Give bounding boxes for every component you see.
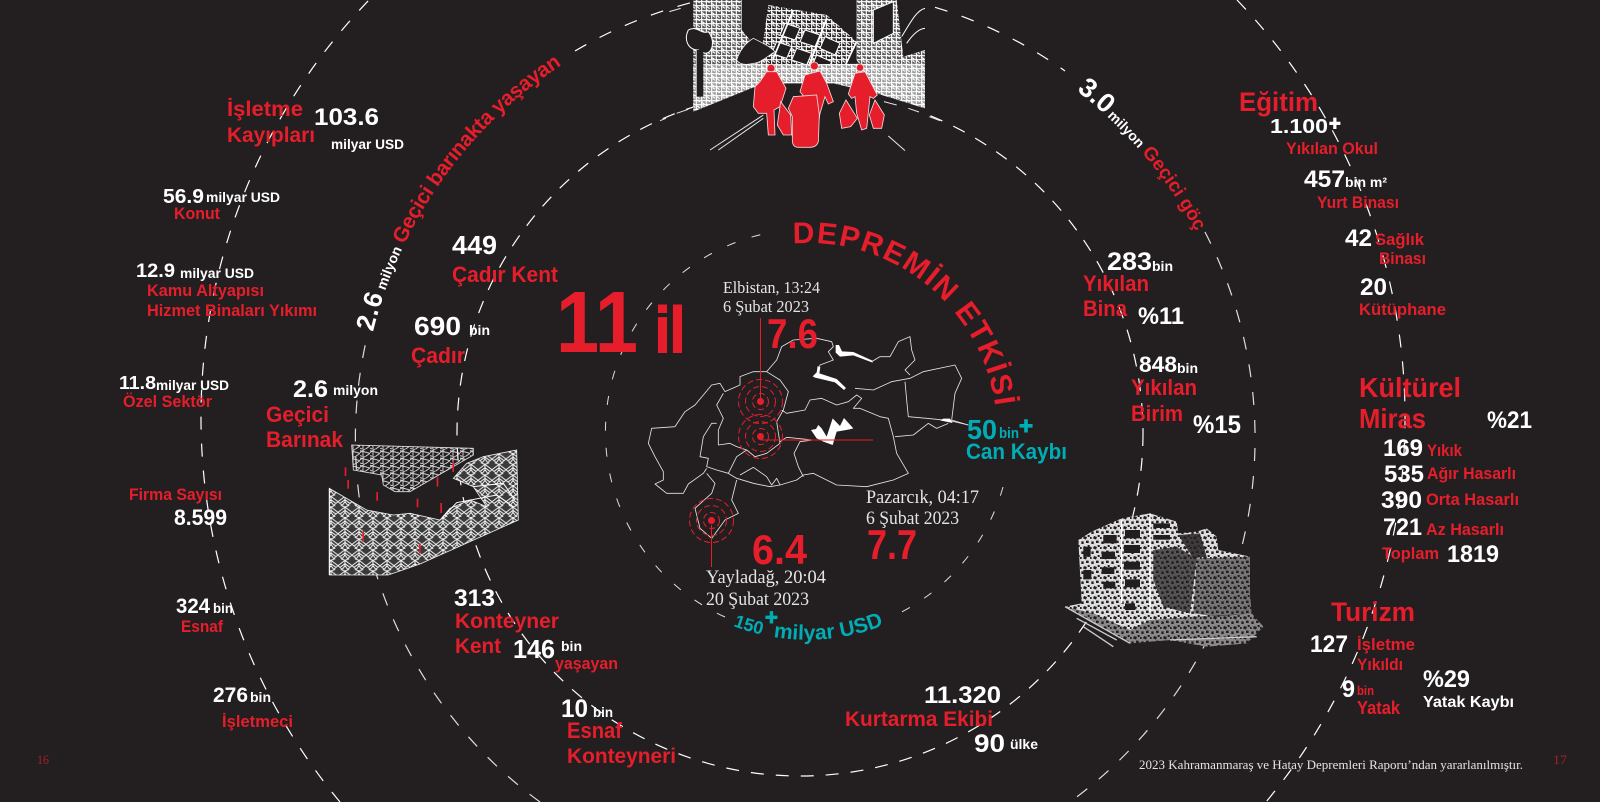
section: education: Kütüphane [1359, 300, 1446, 319]
quake: Elbistan [723, 278, 820, 357]
section: cultural heritage: Ağır Hasarlı [1427, 465, 1516, 483]
map of affected provinces [648, 337, 968, 538]
section: cultural heritage: Kültürel [1359, 372, 1461, 403]
stat: tradesman containers [561, 695, 676, 768]
stat: casualties: + [1019, 413, 1033, 440]
stat: operators: 276 [213, 684, 248, 707]
stat: private sector: milyar USD [156, 377, 229, 393]
section: education [1239, 87, 1446, 319]
section: education: Binası [1379, 250, 1426, 268]
section: tourism: Yıkıldı [1357, 655, 1403, 674]
stat: firms [129, 486, 227, 530]
quake: Elbistan: 7.6 [767, 310, 818, 357]
stat: private sector [119, 373, 229, 411]
curved stat: temporary shelter: Geçici barınakta yaşayan [394, 58, 561, 242]
curved stat: economic cost [734, 605, 882, 644]
red figures [753, 62, 884, 147]
road lines [660, 8, 940, 151]
section: education: bin m² [1345, 174, 1387, 190]
stat: housing [163, 186, 280, 223]
stat: private sector: Özel Sektör [123, 392, 213, 411]
stat: business losses: milyar USD [331, 136, 404, 152]
section: tourism: 9 [1342, 676, 1355, 703]
stat: tents: Çadır [411, 343, 465, 368]
curved stat: temporary migration: milyon [1108, 112, 1142, 148]
stat: collapsed buildings: Yıkılan [1083, 271, 1149, 296]
stat: collapsed buildings: bin [1152, 258, 1173, 274]
section: tourism: %29 [1423, 666, 1470, 693]
stat: rescue teams [845, 682, 1038, 758]
quake: Yayladag: Yayladağ, 20:04 [706, 567, 826, 588]
section: education: 1.100 [1270, 116, 1328, 138]
stat: business losses [227, 98, 404, 152]
stat: business losses: İşletme [227, 98, 303, 121]
stat: rescue teams: Kurtarma Ekibi [845, 708, 993, 731]
tilted building windows [772, 23, 840, 73]
headline: 11 provinces: 11 [556, 274, 638, 371]
inner dashed ring [605, 233, 1003, 618]
curved stat: economic cost: + [765, 605, 778, 630]
stat: collapsed buildings: 283 [1107, 248, 1152, 276]
section: cultural heritage: 169 [1383, 435, 1423, 462]
stat: business losses: Kayıpları [227, 124, 315, 147]
stat: tents: bin [469, 322, 490, 338]
stat: collapsed buildings [1083, 248, 1184, 330]
stat: collapsed units: bin [1177, 360, 1198, 376]
stat: tradesman containers: bin [593, 704, 613, 720]
stat: tradespeople: Esnaf [181, 617, 223, 636]
curved stat: temporary migration: Geçici göç [1144, 146, 1203, 230]
section: cultural heritage [1359, 372, 1532, 568]
quake: Pazarcik: 7.7 [867, 521, 917, 568]
illustration: tents and containers [329, 445, 518, 575]
section: cultural heritage: Az Hasarlı [1426, 521, 1504, 539]
stat: collapsed units: %15 [1193, 411, 1241, 439]
stat: business losses: 103.6 [314, 104, 379, 131]
windows [1083, 523, 1170, 610]
stat: container cities: bin [561, 638, 582, 654]
section: cultural heritage: Miras [1359, 403, 1426, 434]
stat: collapsed units [1131, 352, 1241, 439]
stat: rescue teams: ülke [1010, 736, 1038, 752]
stat: tradesman containers: Esnaf [567, 718, 623, 743]
stat: collapsed buildings: Bina [1083, 296, 1128, 321]
stat: operators: İşletmeci [222, 712, 293, 731]
section: cultural heritage: 535 [1384, 461, 1424, 488]
quake: Pazarcik: 6 Şubat 2023 [866, 508, 959, 529]
section: cultural heritage: Yıkık [1427, 442, 1463, 460]
stat: container cities: 146 [513, 634, 555, 664]
stat: temporary shelter total [266, 376, 378, 452]
section: tourism: 127 [1310, 631, 1348, 658]
stat: firms: 8.599 [174, 505, 227, 530]
section: tourism: İşletme [1357, 635, 1415, 654]
curved title: DEPREMİN ETKİSİ [794, 222, 1020, 404]
stat: housing: milyar USD [206, 189, 280, 205]
section: tourism [1310, 597, 1514, 718]
quake: Yayladag: 20 Şubat 2023 [706, 589, 809, 610]
stat: operators: bin [250, 689, 271, 705]
section: education: + [1329, 113, 1341, 135]
stat: tradespeople: bin [213, 600, 233, 616]
epicentre: Yayladag [690, 498, 734, 567]
stat: casualties [966, 413, 1067, 464]
red figures in camp [345, 461, 454, 553]
stat: tent cities [452, 230, 559, 287]
stat: tent cities: Çadır Kent [452, 262, 559, 287]
quake: Elbistan: 6 Şubat 2023 [723, 297, 809, 316]
stat: collapsed units: Birim [1131, 401, 1183, 426]
curved stat: temporary shelter: 2.6 [356, 292, 382, 332]
stat: housing: Konut [174, 205, 220, 223]
curved stat: temporary shelter [356, 58, 561, 332]
stat: tradesman containers: 10 [561, 695, 588, 723]
stat: operators [213, 684, 293, 731]
stat: temporary shelter total: 2.6 [293, 376, 328, 403]
stat: rescue teams: 90 [974, 730, 1005, 758]
second dashed ring [457, 90, 1143, 776]
stat: tents [411, 311, 490, 368]
stat: tradesman containers: Konteyneri [567, 745, 676, 768]
epicentre: Elbistan [738, 318, 782, 424]
curved stat: temporary shelter: milyon [378, 247, 402, 290]
section: education: 42 [1345, 225, 1372, 252]
section: cultural heritage: 1819 [1447, 541, 1499, 568]
outer dashed ring [201, 0, 1405, 802]
section: tourism: Yatak [1357, 698, 1401, 718]
third dashed ring [355, 0, 1255, 802]
stat: temporary shelter total: Barınak [266, 427, 344, 452]
section: education: Eğitim [1239, 87, 1318, 117]
section: cultural heritage: %21 [1487, 407, 1532, 434]
quake: Elbistan: Elbistan, 13:24 [723, 278, 820, 297]
stat: container cities: yaşayan [555, 654, 618, 673]
stat: firms: Firma Sayısı [129, 486, 222, 504]
section: cultural heritage: Orta Hasarlı [1426, 491, 1519, 509]
headline: 11 provinces: il [655, 294, 685, 366]
stat: casualties: bin [999, 425, 1019, 442]
curved stat: temporary migration [1079, 78, 1203, 230]
stat: collapsed units: Yıkılan [1131, 375, 1197, 400]
stat: public infrastructure: 12.9 [136, 261, 175, 282]
page number left: 16 [37, 752, 49, 767]
stat: container cities: Kent [455, 635, 501, 658]
stat: collapsed buildings: %11 [1138, 303, 1184, 330]
section: tourism: Yatak Kaybı [1423, 694, 1514, 711]
stat: public infrastructure [136, 261, 317, 320]
stat: temporary shelter total: milyon [333, 382, 378, 398]
section: education: Yıkılan Okul [1286, 140, 1378, 158]
section: education: Sağlık [1375, 231, 1425, 249]
stat: collapsed units: 848 [1139, 352, 1177, 377]
stat: rescue teams: 11.320 [924, 682, 1001, 709]
stat: public infrastructure: milyar USD [180, 265, 254, 281]
illustration: people leaving collapsed street [660, 0, 940, 151]
stat: public infrastructure: Hizmet Binaları Yıkımı [147, 302, 317, 320]
section: tourism: Turizm [1331, 597, 1415, 627]
quake: Pazarcik: Pazarcık, 04:17 [866, 487, 979, 508]
section: education: 20 [1360, 274, 1387, 301]
epicentre: Pazarcik [738, 414, 873, 458]
stat: tent cities: 449 [452, 230, 497, 260]
quake: Pazarcik [866, 487, 979, 568]
quake: Yayladag: 6.4 [752, 526, 808, 573]
section: tourism: bin [1357, 683, 1374, 698]
section: education: 457 [1304, 166, 1345, 193]
section: cultural heritage: 390 [1381, 487, 1422, 514]
stat: tradespeople [176, 595, 233, 636]
stat: container cities: Konteyner [455, 610, 559, 633]
section: education: Yurt Binası [1317, 194, 1399, 212]
stat: tents: 690 [414, 311, 461, 341]
section: cultural heritage: Toplam [1382, 544, 1439, 563]
source note: 2023 Kahramanmaraş ve Hatay Depremleri Raporu’ndan yararlanılmıştır. [1139, 758, 1523, 772]
curved stat: economic cost: milyar USD [774, 614, 882, 644]
stat: container cities [454, 585, 618, 673]
curved stat: temporary migration: 3.0 [1079, 78, 1114, 112]
stat: public infrastructure: Kamu Altyapısı [147, 282, 264, 300]
stat: private sector: 11.8 [119, 373, 156, 393]
lakes [811, 345, 953, 445]
quake: Yayladag [706, 526, 826, 610]
curved stat: economic cost: 150 [734, 616, 763, 634]
stat: temporary shelter total: Geçici [266, 402, 329, 427]
stat: container cities: 313 [454, 585, 495, 612]
stat: casualties: 50 [967, 414, 997, 445]
stat: tradespeople: 324 [176, 595, 210, 618]
stat: casualties: Can Kaybı [966, 439, 1067, 464]
stat: housing: 56.9 [163, 186, 204, 208]
illustration: collapsed building [1065, 513, 1263, 647]
page number right: 17 [1553, 752, 1568, 767]
section: cultural heritage: 721 [1383, 514, 1422, 541]
